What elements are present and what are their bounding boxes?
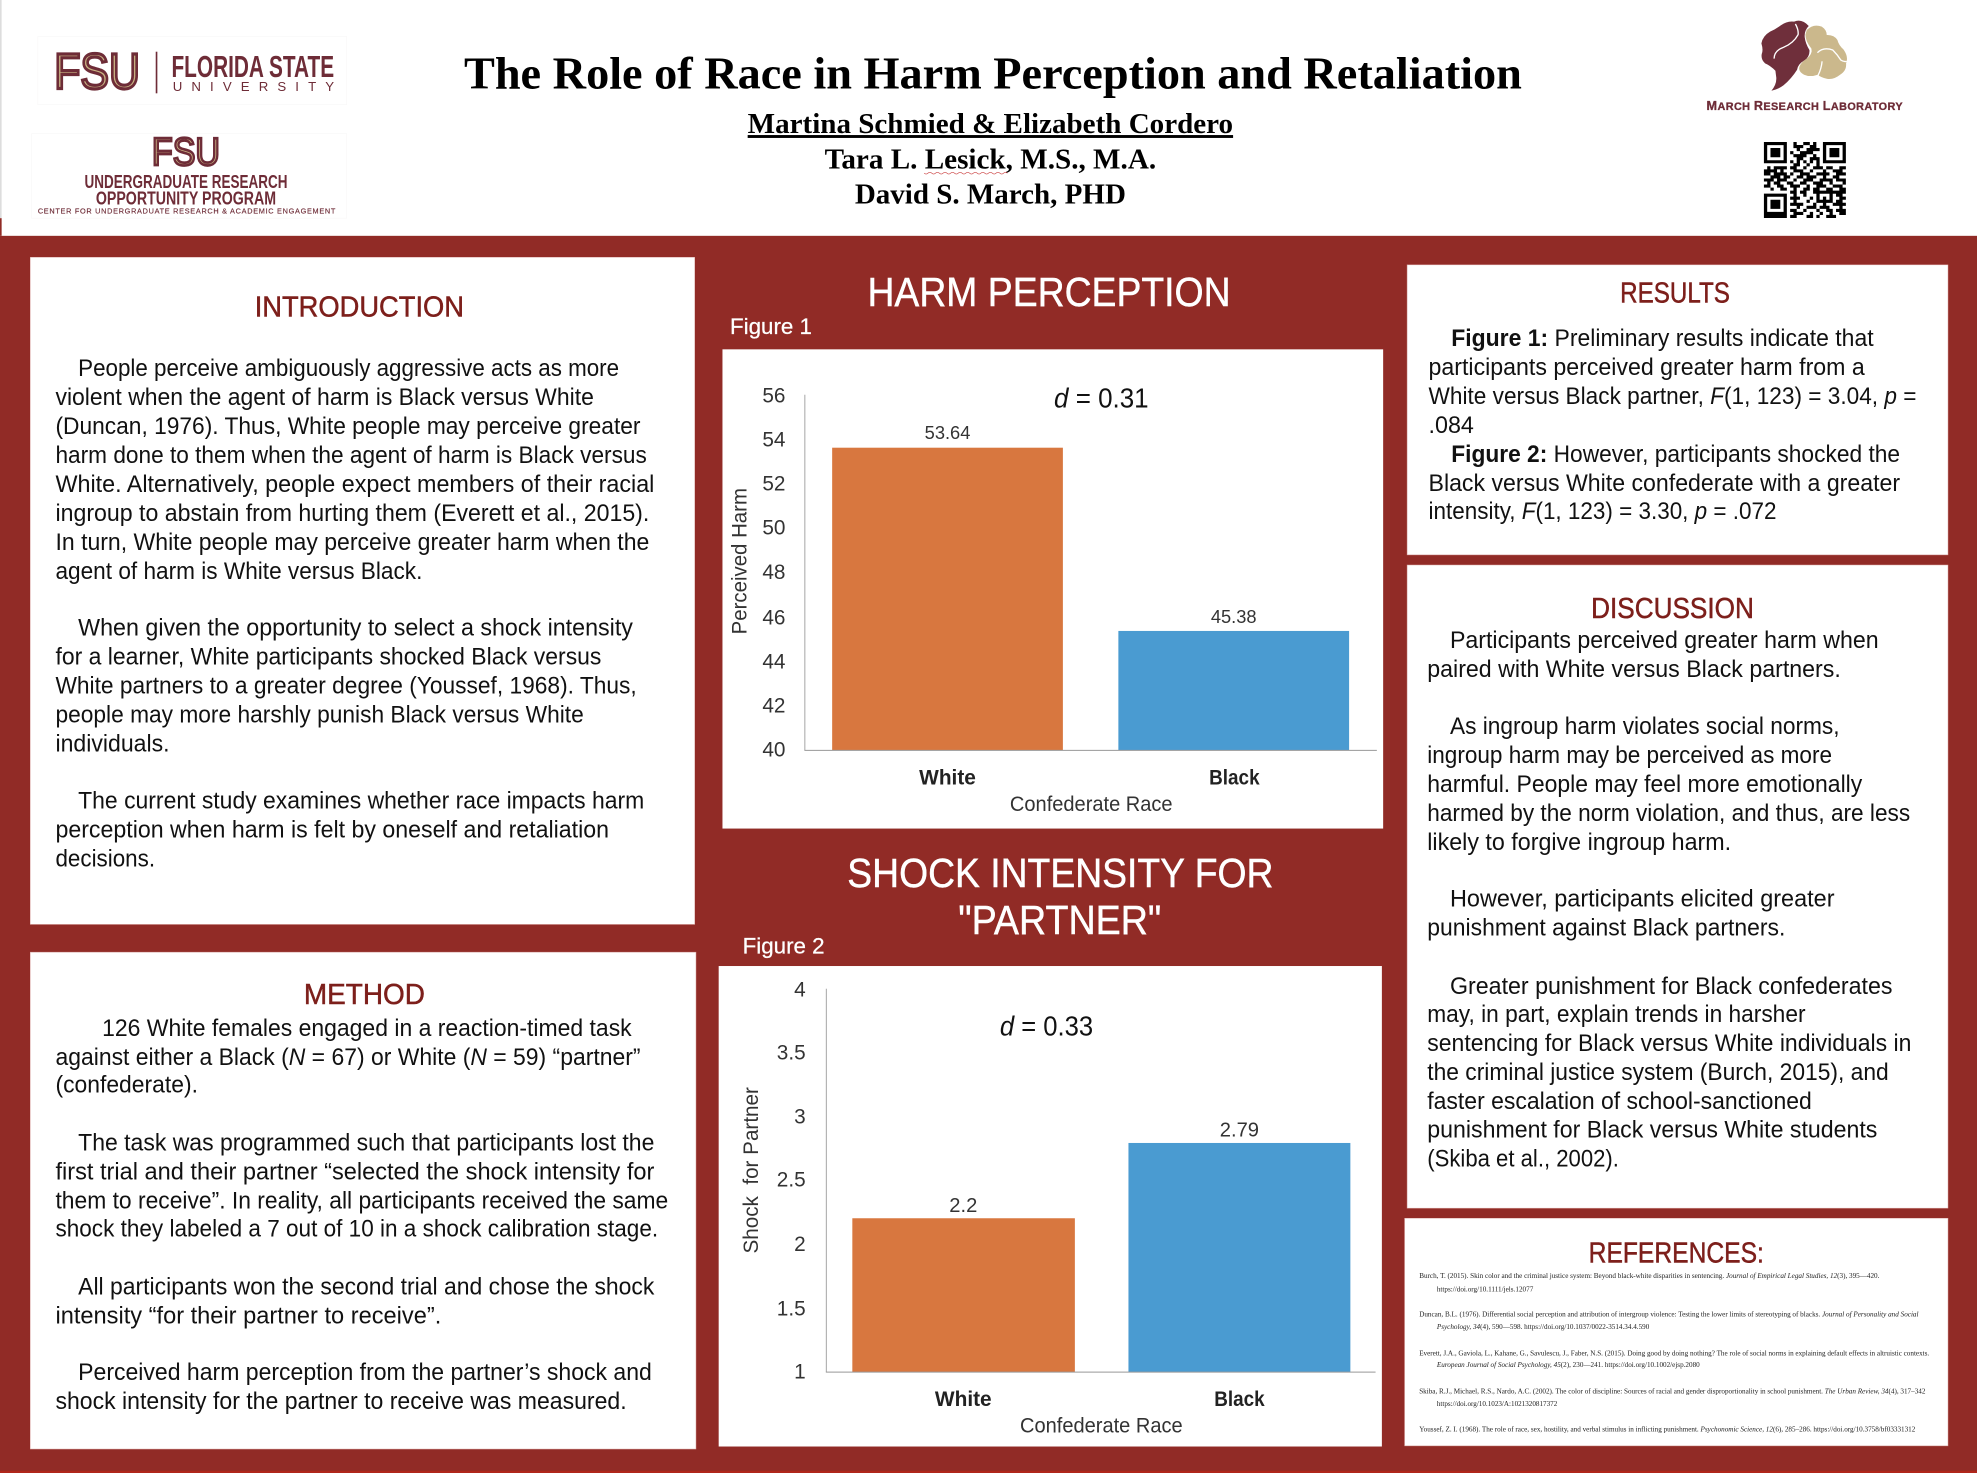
text block: discussion: may, in part, explain trends in harsher [1427,1001,1806,1028]
text block: introduction: harm done to them when the agent of harm is Black versus [55,442,647,469]
logo: Undergraduate Research Opportunity Program: FSU [152,131,220,174]
text block: method: All participants won the second trial and chose the shock [78,1273,654,1300]
text block: references: https://doi.org/10.1023/A:1021320817372 [1437,1400,1558,1408]
logo: Undergraduate Research Opportunity Program [32,131,347,218]
x axis: confederate race: White [919,766,976,789]
x axis: confederate race: Black [1214,1388,1265,1411]
y axis: shock for partner: 3 [794,1106,806,1129]
y axis: perceived harm [728,384,805,762]
y axis: shock for partner: 1.5 [777,1297,806,1320]
text block: discussion: punishment against Black partners. [1427,915,1785,942]
y axis: perceived harm: 40 [762,739,786,762]
text block: references: https://doi.org/10.1111/jels.12077 [1437,1285,1534,1293]
y axis: perceived harm: 46 [762,606,786,629]
panel: results [1407,265,1948,555]
QR code [1764,144,1846,216]
text block: discussion: (Skiba et al., 2002). [1427,1146,1619,1173]
text block: introduction: When given the opportunity to select a shock intensity [78,615,633,642]
x axis: confederate race [935,1388,1265,1438]
text block: references: Psychology, 34(4), 590—598. https://doi.org/10.1037/0022-3514.34.4.590 [1436,1323,1650,1331]
y axis: shock for partner: 4 [794,978,806,1001]
text block: discussion: paired with White versus Black partners. [1427,656,1841,683]
panel: introduction [30,257,695,924]
bar: white 53.64: 53.64 [925,422,970,443]
text block: references: Youssef, Z. I. (1968). The role of race, sex, hostility, and verbal stimulus in inflicting punishment. Psychonomic Science, 12(6), 285–286. https://doi.org/10.3758/bf03331312 [1419,1425,1916,1433]
text block: discussion: punishment for Black versus White students [1427,1117,1877,1144]
text block: discussion [1427,627,1911,1173]
y axis: perceived harm: 48 [762,561,786,584]
panel: figure 2 bar chart [719,966,1382,1447]
y axis: perceived harm: 44 [762,650,786,673]
y axis: perceived harm: 54 [762,428,786,451]
authors: Tara L. Lesick, M.S., M.A. [825,143,1156,175]
text block: introduction: individuals. [55,731,170,758]
effect size: d = 0.33: d = 0.33 [1000,1010,1093,1041]
panel: method [30,952,696,1449]
logo: March Research Laboratory brain: MARCH RESEARCH LABORATORY [1707,99,1903,113]
text block: method: shock intensity for the partner to receive was measured. [55,1388,627,1415]
x axis: confederate race: Confederate Race [1010,793,1173,816]
text block: introduction: ingroup to abstain from hurting them (Everett et al., 2015). [55,500,649,527]
logo: Undergraduate Research Opportunity Program: CENTER FOR UNDERGRADUATE RESEARCH & ACADEMIC ENGAGEMENT [38,207,336,216]
y axis: perceived harm: 42 [762,695,786,718]
heading: shock intensity for partner: "PARTNER" [958,897,1161,943]
text block: discussion: likely to forgive ingroup harm. [1427,829,1731,856]
label: figure 2: Figure 2 [743,933,825,958]
text block: method: first trial and their partner “selected the shock intensity for [55,1159,654,1186]
text block: introduction: People perceive ambiguously aggressive acts as more [78,355,619,382]
bar: black 45.38: 45.38 [1211,606,1257,627]
y axis: perceived harm: 52 [762,473,786,496]
text block: method: Perceived harm perception from the partner’s shock and [78,1359,652,1386]
heading: introduction: INTRODUCTION [255,292,464,324]
heading: references: REFERENCES: [1589,1237,1764,1269]
text block: results: intensity, F(1, 123) = 3.30, p = .072 [1429,498,1777,525]
text block: introduction: The current study examines whether race impacts harm [78,787,644,814]
y axis: shock for partner [740,978,827,1383]
heading: method: METHOD [304,979,425,1011]
y axis: perceived harm: 50 [762,517,786,540]
text block: introduction: In turn, White people may perceive greater harm when the [55,529,649,556]
logo: Undergraduate Research Opportunity Program: UNDERGRADUATE RESEARCH [84,172,287,193]
text block: method [55,1015,668,1415]
text block: introduction: for a learner, White participants shocked Black versus [55,644,601,671]
text block: discussion: However, participants elicited greater [1450,886,1835,913]
authors [748,108,1233,211]
x axis: confederate race [919,766,1260,816]
text block: discussion: harmful. People may feel more emotionally [1427,771,1862,798]
label: figure 1: Figure 1 [730,314,812,339]
heading: shock intensity for partner: SHOCK INTENSITY FOR [847,850,1273,896]
text block: references: Everett, J.A., Gaviola, L., Kahane, G., Savulescu, J., Faber, N.S. (2015). Doing good by doing nothing? The role of social norms in explaining default effects in altruistic contexts. [1419,1349,1929,1357]
text block: references [1419,1272,1929,1433]
text block: introduction: violent when the agent of harm is Black versus White [55,384,594,411]
heading: discussion: DISCUSSION [1591,593,1754,625]
text block: method: against either a Black (N = 67) or White (N = 59) “partner” [55,1044,641,1071]
logo: Florida State University [38,37,347,105]
text block: results: Black versus White confederate with a greater [1429,470,1900,497]
text block: results: Figure 1: Preliminary results indicate that [1451,325,1874,352]
text block: discussion: As ingroup harm violates social norms, [1450,713,1840,740]
text block: discussion: faster escalation of school-sanctioned [1427,1088,1812,1115]
panel: references [1405,1218,1948,1446]
heading: results: RESULTS [1620,278,1730,310]
bar: white 2.2: 2.2 [949,1195,977,1217]
text block: results: Figure 2: However, participants shocked the [1451,441,1900,468]
text block: introduction: people may more harshly punish Black versus White [55,702,584,729]
text block: references: Duncan, B.L. (1976). Differential social perception and attribution of intergroup violence: Testing the lower limits of stereotyping of blacks. Journal of Personality and Social [1419,1310,1919,1318]
text block: method: (confederate). [55,1072,198,1099]
effect size: d = 0.31: d = 0.31 [1054,382,1149,413]
logo: Florida State University: FLORIDA STATE [171,51,334,84]
y axis: shock for partner: Shock for Partner [740,1087,763,1254]
text block: discussion: Participants perceived greater harm when [1450,627,1879,654]
text block: results: participants perceived greater harm from a [1429,354,1866,381]
text block: method: shock they labeled a 7 out of 10 in a shock calibration stage. [55,1215,658,1242]
text block: results [1429,325,1916,525]
authors: David S. March, PHD [855,179,1126,211]
text block: introduction: decisions. [55,845,155,872]
text block: discussion: Greater punishment for Black confederates [1450,973,1893,1000]
bar: white 53.64 [832,422,1063,750]
authors: Martina Schmied & Elizabeth Cordero [748,108,1233,140]
bar: white 2.2 [852,1195,1075,1372]
text block: introduction: White partners to a greater degree (Youssef, 1968). Thus, [55,673,637,700]
heading: harm perception: HARM PERCEPTION [867,269,1231,315]
text block: references: Skiba, R.J., Michael, R.S., Nardo, A.C. (2002). The color of discipline: Sources of racial and gender disproportionality in school punishment. The Urban Review, 34(4), 317–342 [1419,1388,1926,1396]
text block: method: 126 White females engaged in a reaction-timed task [102,1015,632,1042]
text block: introduction [55,355,654,872]
text block: introduction: agent of harm is White versus Black. [55,558,422,585]
y axis: shock for partner: 1 [794,1360,806,1383]
y axis: shock for partner: 3.5 [777,1041,806,1064]
bar: black 2.79 [1128,1119,1350,1372]
logo: Undergraduate Research Opportunity Program: OPPORTUNITY PROGRAM [96,188,276,209]
text block: references: European Journal of Social Psychology, 45(2), 230—241. https://doi.org/10.1002/ejsp.2080 [1436,1361,1700,1369]
logo: Florida State University: FSU [54,42,140,99]
x axis: confederate race: White [935,1388,992,1411]
y axis: shock for partner: 2.5 [777,1169,806,1192]
y axis: shock for partner: 2 [794,1233,806,1256]
text block: discussion: the criminal justice system (Burch, 2015), and [1427,1059,1889,1086]
y axis: perceived harm: Perceived Harm [728,488,751,634]
text block: introduction: White. Alternatively, people expect members of their racial [55,471,654,498]
x axis: confederate race: Confederate Race [1020,1415,1183,1438]
logo: March Research Laboratory brain [1707,21,1903,113]
panel: discussion [1407,565,1948,1208]
text block: results: .084 [1429,412,1474,439]
x axis: confederate race: Black [1209,766,1260,789]
logo: Florida State University: UNIVERSITY [173,79,334,94]
text block: introduction: (Duncan, 1976). Thus, White people may perceive greater [55,413,641,440]
text block: discussion: harmed by the norm violation, and thus, are less [1427,800,1910,827]
panel: figure 1 bar chart [722,349,1383,829]
text block: discussion: sentencing for Black versus White individuals in [1427,1030,1911,1057]
text block: method: The task was programmed such that participants lost the [78,1130,654,1157]
text block: references: Burch, T. (2015). Skin color and the criminal justice system: Beyond black-white disparities in sentencing. Journal of Empirical Legal Studies, 12(3), 395—420. [1419,1272,1880,1280]
text block: method: intensity “for their partner to receive”. [55,1303,441,1330]
y axis: perceived harm: 56 [762,384,786,407]
bar: black 45.38 [1118,606,1349,750]
text block: discussion: ingroup harm may be perceived as more [1427,742,1832,769]
heading: shock intensity for partner [847,850,1273,943]
text block: method: them to receive”. In reality, all participants received the same [55,1188,668,1215]
bar: black 2.79: 2.79 [1220,1119,1259,1141]
text block: introduction: perception when harm is felt by oneself and retaliation [55,816,609,843]
title: The Role of Race in Harm Perception and Retaliation [464,47,1522,98]
text block: results: White versus Black partner, F(1, 123) = 3.04, p = [1429,383,1916,410]
